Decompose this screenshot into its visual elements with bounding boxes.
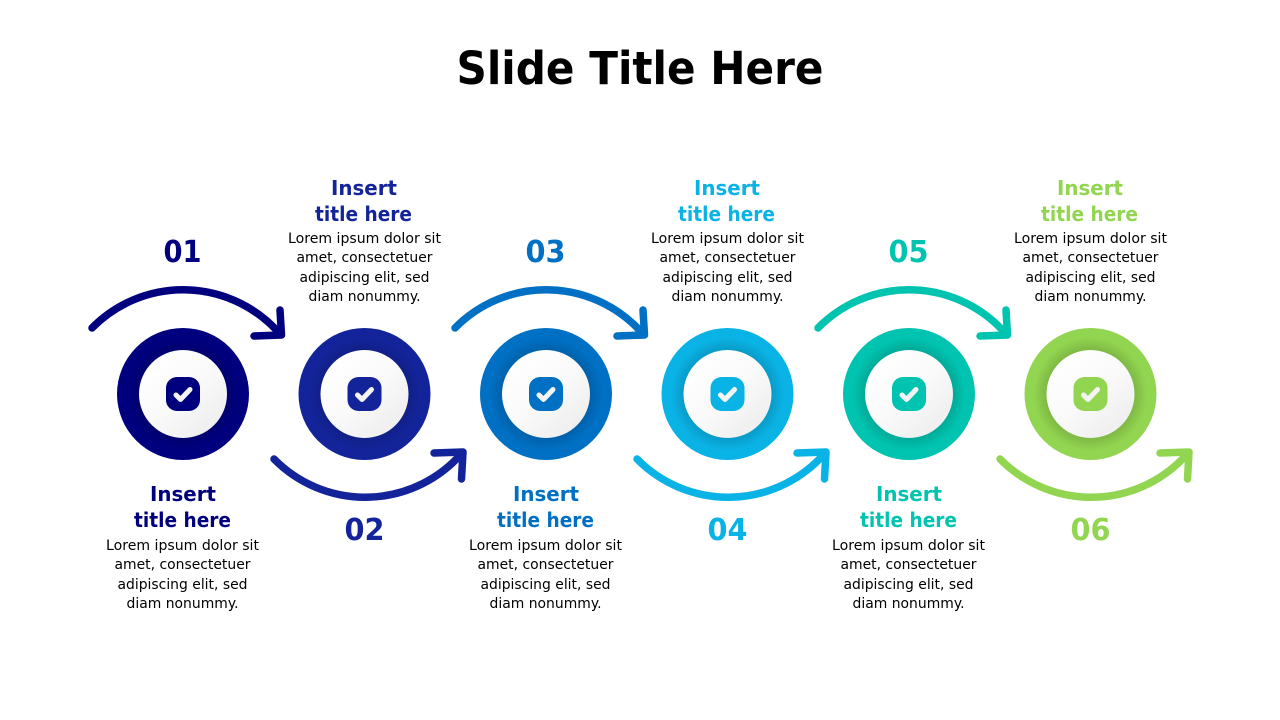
- heading 02: [315, 176, 412, 226]
- text 01: Lorem ipsum dolor sit: [106, 538, 259, 554]
- number 03: 03: [526, 235, 566, 270]
- arrow 03: [455, 290, 644, 336]
- text 04: adipiscing elit, sed: [662, 270, 792, 286]
- number 04: 04: [708, 513, 748, 548]
- circle 03: [480, 328, 612, 460]
- heading 04: Insert: [694, 176, 760, 200]
- icon: check 04: [710, 377, 744, 411]
- circle 02: [298, 328, 430, 460]
- heading 03: Insert: [513, 482, 579, 506]
- arrow 02: [274, 452, 463, 497]
- heading 04: title here: [678, 202, 775, 226]
- heading 02: Insert: [331, 176, 397, 200]
- text 03: diam nonummy.: [490, 596, 602, 612]
- text 06: Lorem ipsum dolor sit: [1014, 231, 1167, 247]
- heading 03: title here: [497, 508, 594, 532]
- text 06: adipiscing elit, sed: [1026, 270, 1156, 286]
- text 02: amet, consectetuer: [296, 250, 433, 266]
- text 01: adipiscing elit, sed: [118, 577, 248, 593]
- text 03: amet, consectetuer: [478, 557, 614, 573]
- text 04: [651, 231, 804, 305]
- text 04: diam nonummy.: [672, 289, 784, 305]
- number 05: 05: [888, 235, 928, 270]
- text 05: amet, consectetuer: [840, 557, 977, 573]
- text 05: [832, 538, 985, 612]
- arrow 01: [92, 290, 282, 336]
- icon: check 01: [166, 377, 200, 411]
- number 01: 01: [164, 235, 202, 270]
- icon: check 06: [1074, 377, 1108, 411]
- text 02: [288, 231, 441, 305]
- text 02: Lorem ipsum dolor sit: [288, 231, 441, 247]
- arrow 04: [637, 452, 826, 497]
- heading 03: [497, 482, 594, 532]
- heading 02: title here: [315, 202, 412, 226]
- heading 05: Insert: [876, 482, 942, 506]
- text 01: diam nonummy.: [126, 596, 238, 612]
- circle 04: [662, 328, 794, 460]
- text 04: Lorem ipsum dolor sit: [651, 231, 804, 247]
- step 03: [455, 235, 644, 612]
- arrow 05: [818, 290, 1008, 336]
- heading 05: title here: [860, 508, 957, 532]
- step 04: [637, 176, 826, 548]
- heading 06: Insert: [1057, 176, 1123, 200]
- text 02: diam nonummy.: [308, 289, 420, 305]
- heading 01: Insert: [150, 482, 216, 506]
- text 02: adipiscing elit, sed: [300, 270, 430, 286]
- icon: check 05: [892, 377, 926, 411]
- heading 01: [134, 482, 231, 532]
- heading 05: [860, 482, 957, 532]
- number 02: 02: [344, 513, 384, 548]
- circle 01: [117, 328, 249, 460]
- icon: check 02: [348, 377, 382, 411]
- heading 06: title here: [1041, 202, 1138, 226]
- heading 01: title here: [134, 508, 231, 532]
- text 05: Lorem ipsum dolor sit: [832, 538, 985, 554]
- step 06: [1000, 176, 1189, 548]
- text 03: Lorem ipsum dolor sit: [469, 538, 622, 554]
- number 06: 06: [1070, 513, 1110, 548]
- title: Slide Title Here: [456, 42, 824, 95]
- text 06: diam nonummy.: [1034, 289, 1146, 305]
- heading 06: [1041, 176, 1138, 226]
- step 05: [818, 235, 1008, 612]
- text 03: [469, 538, 622, 612]
- arrow 06: [1000, 452, 1189, 497]
- text 06: [1014, 231, 1167, 305]
- text 05: adipiscing elit, sed: [844, 577, 974, 593]
- text 01: amet, consectetuer: [114, 557, 251, 573]
- text 04: amet, consectetuer: [660, 250, 796, 266]
- icon: check 03: [529, 377, 563, 411]
- text 06: amet, consectetuer: [1022, 250, 1159, 266]
- circle 05: [843, 328, 975, 460]
- step 02: [274, 176, 463, 548]
- heading 04: [678, 176, 775, 226]
- step 01: [92, 235, 282, 612]
- text 05: diam nonummy.: [852, 596, 964, 612]
- circle 06: [1024, 328, 1156, 460]
- text 01: [106, 538, 259, 612]
- text 03: adipiscing elit, sed: [480, 577, 610, 593]
